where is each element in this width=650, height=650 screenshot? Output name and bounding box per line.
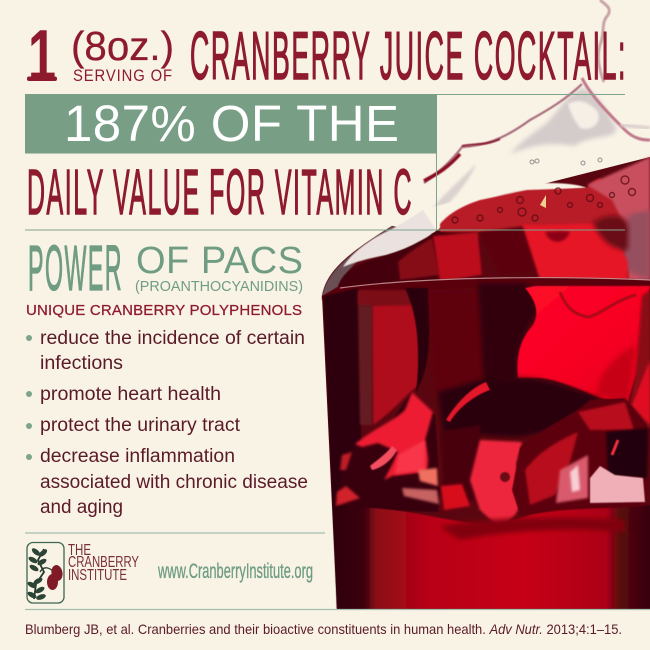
rule: bottom of headline (25, 229, 625, 231)
bright right panel (518, 286, 650, 403)
pale highlight in surface (540, 195, 546, 208)
serving of: SERVING OF (73, 67, 173, 85)
rule: above logo (25, 532, 325, 534)
logo icon (26, 542, 64, 603)
bullet: heart: promote heart health (40, 384, 221, 405)
left dark wall (323, 288, 365, 609)
banner background (25, 94, 437, 154)
lower liquid (336, 505, 650, 609)
bullet: inflammation: and aging (40, 497, 123, 518)
photo: glass of cranberry juice (322, 0, 650, 609)
central dark column (478, 283, 541, 385)
bullet: infections: reduce the incidence of certain (40, 328, 305, 349)
footer band (0, 609, 650, 650)
banner text: 187% OF THE (64, 95, 399, 152)
proanthocyanidins: (PROANTHOCYANIDINS) (135, 278, 303, 295)
bullet list (26, 328, 308, 518)
numeral 1: 1 (28, 16, 56, 96)
logo text: INSTITUTE (68, 567, 127, 584)
splash: translucent liquid above the glass (424, 0, 650, 222)
logo: cranberry institute (26, 542, 139, 603)
glass rim band (322, 278, 650, 300)
bubbles (452, 176, 636, 223)
logo text: CRANBERRY (68, 554, 139, 571)
of pacs: OF PACS (136, 240, 303, 282)
foam above the surface (423, 183, 587, 230)
rule: above citation (25, 608, 650, 610)
rule: top of banner (25, 94, 625, 96)
banner (25, 94, 437, 154)
middle wine panel (428, 290, 484, 395)
bullet: infections: infections (40, 353, 123, 374)
bullet: inflammation (26, 446, 308, 518)
logo text (68, 542, 139, 584)
muted pink right of surface (587, 157, 650, 280)
left red panel (372, 303, 419, 425)
rule: vertical frame (436, 94, 438, 230)
dark mass under column (438, 378, 600, 437)
logo text: THE (68, 542, 91, 559)
bullet: infections (26, 328, 305, 374)
center ice block (440, 425, 530, 528)
glass body (322, 157, 650, 609)
bullet: urinary: protect the urinary tract (40, 415, 241, 436)
serving size: (8oz.) (71, 23, 174, 69)
dark curved band (405, 288, 429, 392)
subheading: UNIQUE CRANBERRY POLYPHENOLS (26, 302, 302, 319)
right dark edge (630, 290, 650, 430)
heading: power of pacs: POWER (28, 232, 123, 304)
citation: Blumberg JB, et al. Cranberries and their bioactive constituents in human health. Adv Nutr. 2013;4:1–15. (25, 621, 622, 637)
website url: www.CranberryInstitute.org (157, 560, 313, 583)
shadow under ice (440, 518, 625, 540)
bullet: inflammation: decrease inflammation (40, 446, 235, 467)
bullet: inflammation: associated with chronic disease (40, 472, 308, 493)
bright surface panel (522, 224, 628, 280)
outer glass shoulder (322, 226, 398, 297)
white foam crest (343, 210, 440, 267)
dark fold in surface (480, 226, 545, 275)
red liquid surface with bubbles (440, 178, 625, 232)
title: first line (27, 16, 627, 96)
dark wine under crest (338, 232, 482, 290)
left ice cube (335, 392, 440, 512)
right ice block (512, 398, 648, 515)
